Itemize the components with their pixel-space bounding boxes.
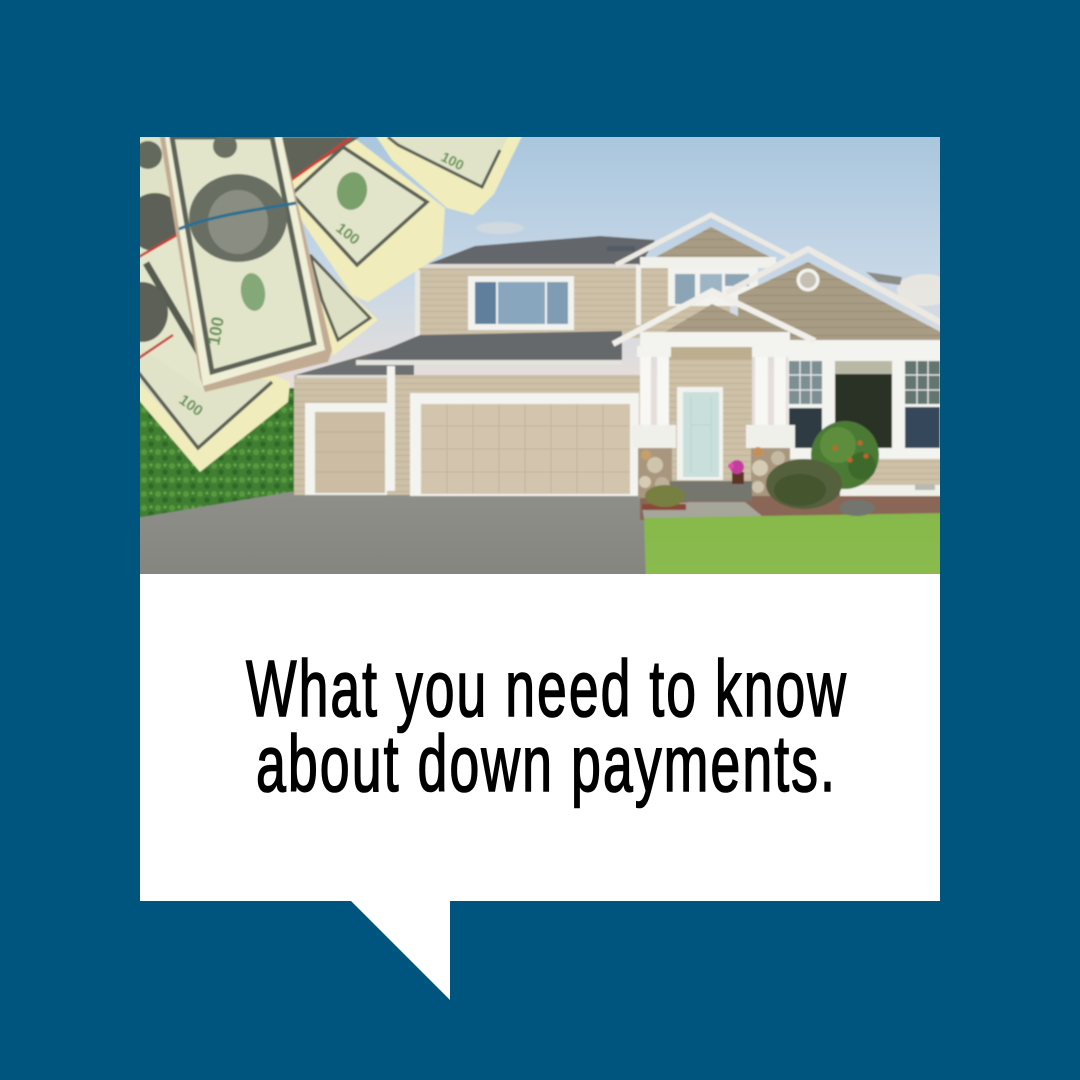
- money stacks: [116, 130, 525, 472]
- stack: centre front: 100: [204, 315, 228, 347]
- infographic canvas: [140, 137, 940, 1000]
- front door: [677, 387, 723, 480]
- stack: upper far right: 100: [439, 148, 467, 173]
- porch: [613, 291, 815, 482]
- lawn base and lawn: [640, 490, 950, 520]
- stack: bottom left: [140, 346, 290, 473]
- photo: house with stacks of money: [116, 127, 953, 584]
- lower roof: [358, 331, 622, 361]
- garage door small: [305, 403, 387, 495]
- flower pot: [728, 460, 744, 484]
- round vent: [796, 268, 820, 292]
- stack: bottom left: 100: [176, 391, 206, 420]
- steps and walkway: [642, 481, 762, 518]
- left low roof: [296, 348, 415, 376]
- right bay wing: [780, 340, 950, 496]
- speech bubble: [140, 574, 940, 1000]
- lower wall: [294, 375, 644, 495]
- hedge: [130, 388, 294, 520]
- garage door large: [410, 393, 639, 496]
- main gable upper: [616, 215, 790, 338]
- stack: upper right: 100: [333, 220, 363, 249]
- stack: upper far right: [376, 137, 522, 216]
- stack: centre front: [160, 134, 332, 392]
- stack: upper right: [282, 137, 445, 302]
- upper window: [468, 276, 574, 330]
- porch columns right: [746, 346, 795, 496]
- shrubs: [645, 421, 879, 516]
- mulch bed: [642, 504, 686, 510]
- porch columns left: [632, 346, 676, 498]
- stack: middle right behind: [305, 250, 378, 356]
- house: [294, 215, 950, 518]
- right gable: [726, 249, 950, 342]
- driveway: [140, 491, 647, 574]
- sky: [140, 137, 940, 426]
- heading: [246, 644, 848, 808]
- upper roof: [428, 236, 655, 266]
- stack: top left: [140, 137, 197, 360]
- upper wall: [418, 268, 642, 338]
